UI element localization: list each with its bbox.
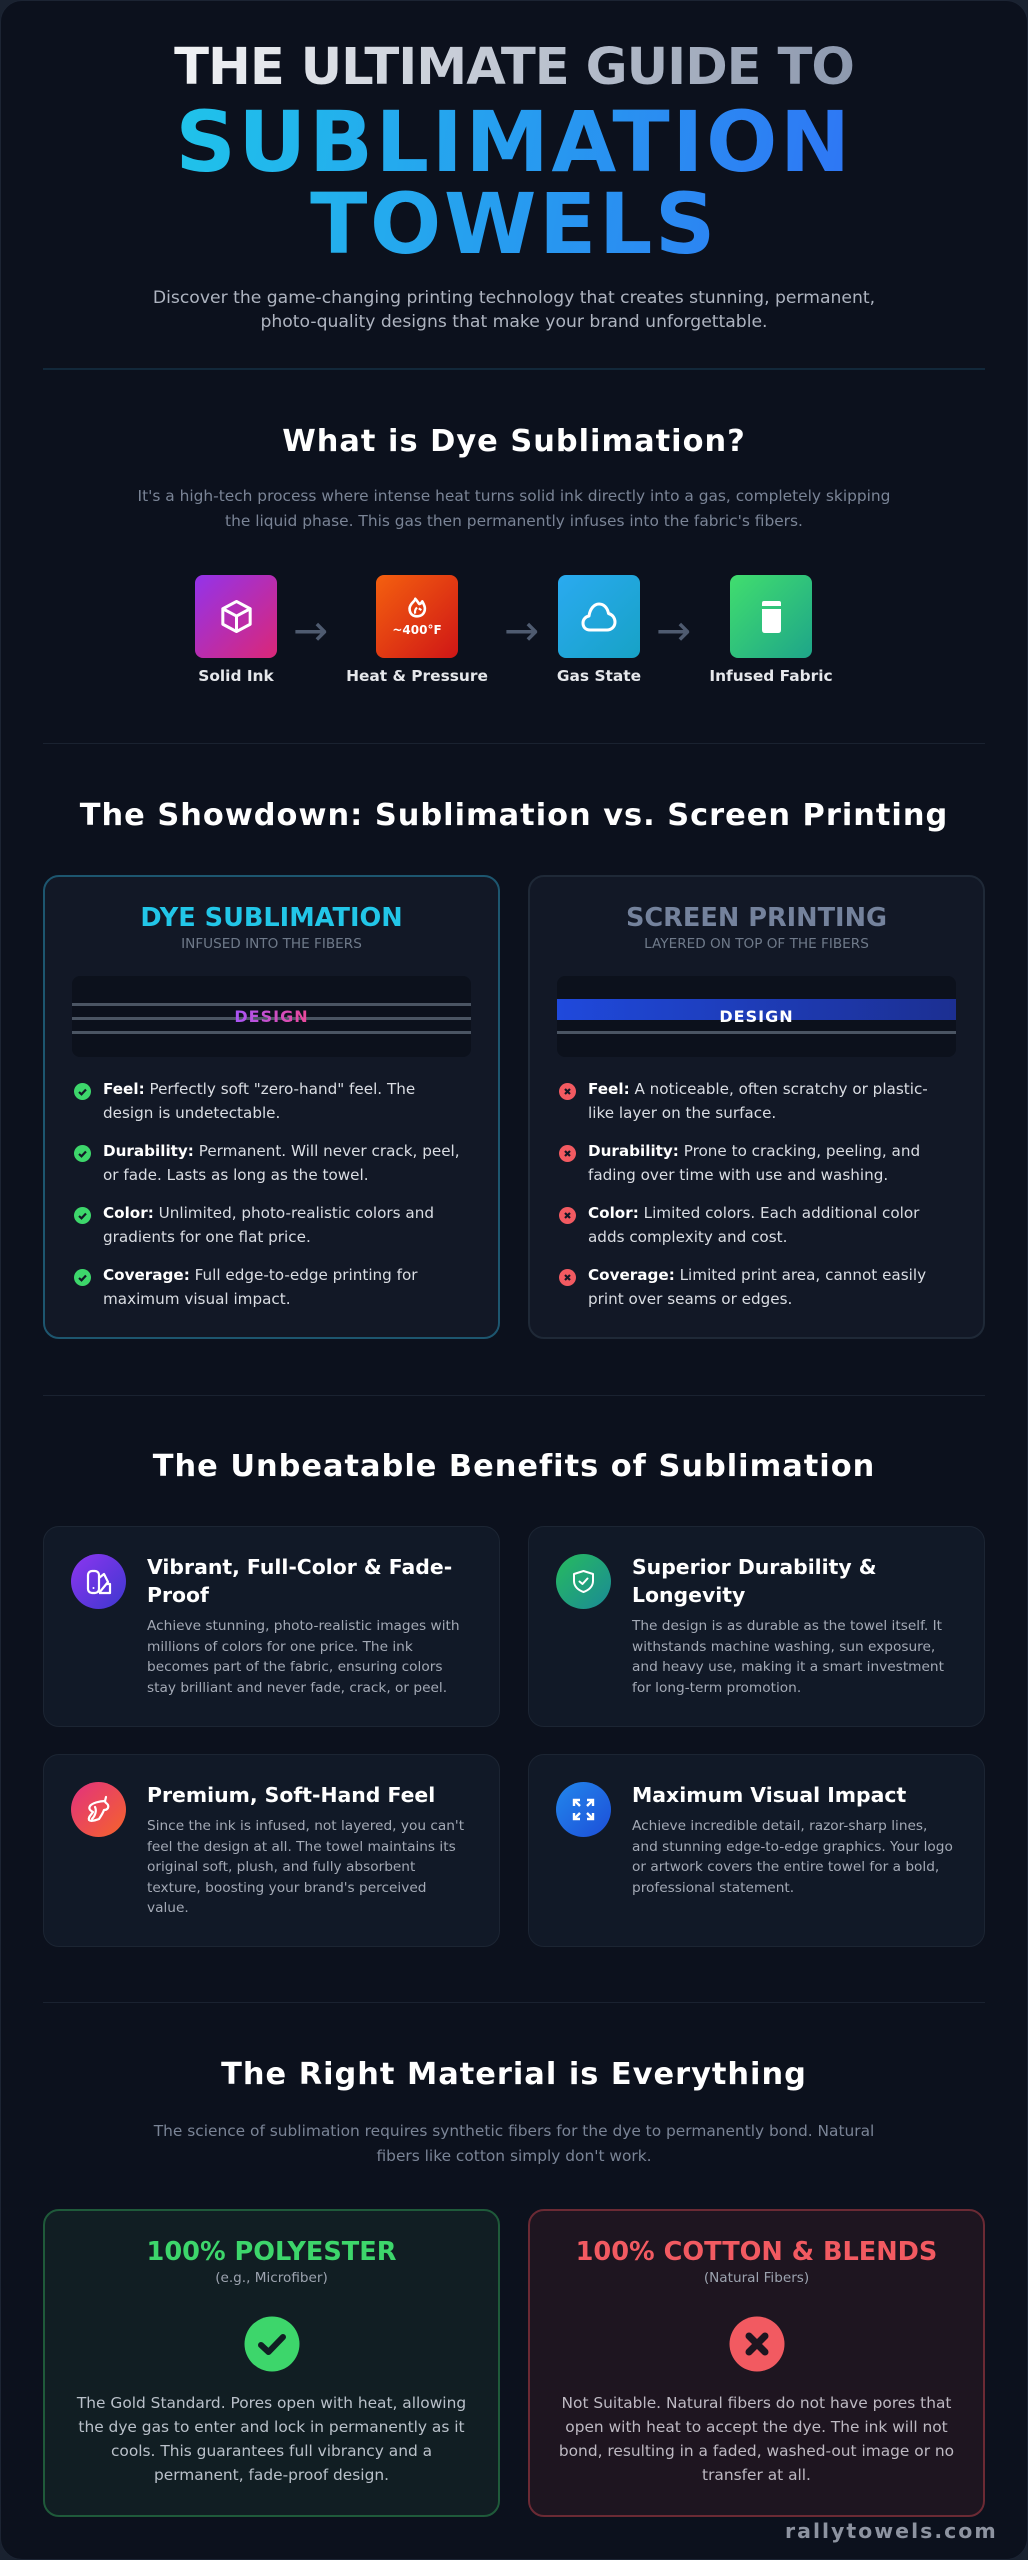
benefit card: durability — [528, 1526, 985, 1727]
panel title: DYE SUBLIMATION — [140, 903, 403, 933]
list item: feel: design is undetectable. — [103, 1104, 280, 1122]
benefit text: stay brilliant and never fade, crack, or peel. — [147, 1680, 447, 1696]
label: infused fabric: Infused Fabric — [709, 667, 833, 685]
label: heat and pressure: Heat & Pressure — [346, 667, 488, 685]
panel text: permanent, fade-proof design. — [154, 2466, 389, 2484]
list item: feel: Feel: A noticeable, often scratchy or plastic- — [588, 1080, 928, 1098]
panel: screen printing — [528, 875, 985, 1339]
icon: hand — [71, 1782, 126, 1837]
benefit text: texture, boosting your brand's perceived — [147, 1880, 426, 1896]
panel text: bond, resulting in a faded, washed-out image or no — [559, 2442, 954, 2460]
benefit title — [147, 1555, 452, 1606]
panel: cotton — [528, 2209, 985, 2517]
icon: cube — [221, 600, 252, 633]
heading: the showdown: The Showdown: Sublimation vs. Screen Printing — [80, 798, 948, 833]
panel subtitle: LAYERED ON TOP OF THE FIBERS — [644, 936, 869, 952]
list item: durability — [74, 1142, 460, 1184]
subtitle: Discover the game-changing printing technology that creates stunning, permanent, — [153, 288, 875, 308]
arrow: → — [504, 606, 539, 655]
icon: fabric roll — [762, 601, 781, 633]
intro text: It's a high-tech process where intense heat turns solid ink directly into a gas, completely skipping — [138, 487, 890, 505]
benefit text: millions of colors for one price. The ink — [147, 1638, 413, 1654]
panel text: the dye gas to enter and lock in permanently as it — [78, 2418, 465, 2436]
benefit title: Premium, Soft-Hand Feel — [147, 1783, 435, 1807]
list item: color: Color: Unlimited, photo-realistic colors and — [103, 1204, 434, 1222]
panel subtitle: INFUSED INTO THE FIBERS — [181, 936, 362, 952]
process step: heat and pressure — [376, 575, 458, 658]
title: sublimation towels: SUBLIMATION — [175, 93, 853, 191]
panel text: The Gold Standard. Pores open with heat, allowing — [77, 2394, 466, 2412]
icon: swatch — [71, 1554, 126, 1609]
benefit text: professional statement. — [632, 1880, 794, 1896]
benefit title: Superior Durability & — [632, 1555, 877, 1579]
benefit text: for long-term promotion. — [632, 1680, 801, 1696]
list item: color: Color: Limited colors. Each additional color — [588, 1204, 919, 1222]
benefit text: Achieve stunning, photo-realistic images with — [147, 1618, 460, 1634]
list item: feel: like layer on the surface. — [588, 1104, 776, 1122]
benefit text: The design is as durable as the towel itself. It — [632, 1618, 942, 1634]
list item: durability: or fade. Lasts as long as the towel. — [103, 1166, 369, 1184]
benefit card: vibrant — [43, 1526, 500, 1727]
panel title: 100% POLYESTER — [147, 2237, 396, 2267]
benefit text: and stunning edge-to-edge graphics. Your logo — [632, 1838, 953, 1854]
icon: cross — [559, 1269, 576, 1286]
material intro text: The science of sublimation requires synthetic fibers for the dye to permanently bond. Natural — [154, 2122, 874, 2140]
list item: coverage — [559, 1266, 926, 1308]
panel text: transfer at all. — [702, 2466, 811, 2484]
panel: dye sublimation — [43, 875, 500, 1339]
benefit card: visual impact — [528, 1754, 985, 1947]
list item: feel — [74, 1080, 415, 1122]
icon: cloud — [582, 602, 616, 632]
benefit text — [632, 1618, 944, 1696]
intro text: the liquid phase. This gas then permanently infuses into the fabric's fibers. — [225, 512, 803, 530]
panel text: cools. This guarantees full vibrancy and a — [111, 2442, 432, 2460]
label: solid ink: Solid Ink — [198, 667, 274, 685]
benefit text — [632, 1818, 953, 1896]
list item: durability: fading over time with use and washing. — [588, 1166, 888, 1184]
icon: check — [74, 1269, 91, 1286]
benefit card: soft hand — [43, 1754, 500, 1947]
list item: coverage — [74, 1266, 418, 1308]
panel text — [559, 2394, 954, 2484]
icon: shield — [556, 1554, 611, 1609]
icon: check — [74, 1207, 91, 1224]
benefit text: value. — [147, 1900, 189, 1916]
heading: what is dye sublimation: What is Dye Sublimation? — [282, 424, 746, 459]
panel subtitle: (Natural Fibers) — [704, 2270, 809, 2286]
process step: infused fabric — [730, 575, 812, 658]
process step: gas state — [558, 575, 640, 658]
title: sublimation towels — [170, 101, 858, 265]
panel: polyester — [43, 2209, 500, 2517]
list item: coverage: Coverage: Full edge-to-edge printing for — [103, 1266, 418, 1284]
list item: color: gradients for one flat price. — [103, 1228, 311, 1246]
panel text: open with heat to accept the dye. The ink will not — [565, 2418, 948, 2436]
list item: feel: Feel: Perfectly soft "zero-hand" feel. The — [103, 1080, 415, 1098]
benefit title: Longevity — [632, 1582, 745, 1606]
title: the ultimate guide to: THE ULTIMATE GUIDE TO — [174, 37, 854, 97]
list item: color — [74, 1204, 434, 1246]
benefit text: Since the ink is infused, not layered, you can't — [147, 1818, 464, 1834]
label: gas state: Gas State — [557, 667, 641, 685]
benefit text: Achieve incredible detail, razor-sharp lines, — [632, 1818, 927, 1834]
subtitle: photo-quality designs that make your brand unforgettable. — [260, 312, 768, 332]
intro text — [138, 487, 890, 530]
design label: DESIGN — [719, 1007, 794, 1026]
panel subtitle: (e.g., Microfiber) — [215, 2270, 328, 2286]
icon: check — [244, 2316, 300, 2372]
list item: durability — [559, 1142, 920, 1184]
benefit text — [147, 1618, 460, 1696]
heading: right material: The Right Material is Everything — [221, 2057, 807, 2092]
subtitle — [153, 288, 875, 332]
benefit title — [632, 1555, 877, 1606]
arrow: → — [293, 606, 328, 655]
diagram: layered design — [557, 976, 956, 1057]
diagram: infused design — [72, 976, 471, 1057]
arrow: → — [656, 606, 691, 655]
benefit text: or artwork covers the entire towel for a bold, — [632, 1859, 939, 1875]
list item: durability: Durability: Permanent. Will never crack, peel, — [103, 1142, 460, 1160]
icon: cross — [730, 2316, 784, 2372]
icon: cross — [559, 1145, 576, 1162]
benefit text: feel the design at all. The towel maintains its — [147, 1838, 456, 1854]
title: sublimation towels: TOWELS — [310, 175, 718, 273]
header — [153, 37, 875, 332]
icon: check — [74, 1083, 91, 1100]
list item: durability: Durability: Prone to cracking, peeling, and — [588, 1142, 920, 1160]
panel text — [76, 2394, 466, 2484]
watermark: rallytowels.com — [785, 2519, 998, 2543]
list item: color — [559, 1204, 920, 1246]
list item: coverage: maximum visual impact. — [103, 1290, 291, 1308]
list item: coverage: Coverage: Limited print area, cannot easily — [588, 1266, 926, 1284]
design label: DESIGN — [234, 1007, 309, 1026]
benefit title: Vibrant, Full-Color & Fade- — [147, 1555, 452, 1579]
list item: color: adds complexity and cost. — [588, 1228, 787, 1246]
panel text: Not Suitable. Natural fibers do not have pores that — [562, 2394, 951, 2412]
benefit title: Maximum Visual Impact — [632, 1783, 906, 1807]
icon: flame — [408, 597, 426, 618]
material intro text — [154, 2122, 874, 2165]
list item: coverage: print over seams or edges. — [588, 1290, 792, 1308]
benefit text: withstands machine washing, sun exposure, — [632, 1638, 935, 1654]
label: temperature: ~400°F — [392, 623, 442, 637]
benefit text: original soft, plush, and fully absorbent — [147, 1859, 415, 1875]
benefit text: becomes part of the fabric, ensuring colors — [147, 1659, 442, 1675]
benefit text: and heavy use, making it a smart investment — [632, 1659, 944, 1675]
panel title: 100% COTTON & BLENDS — [576, 2237, 937, 2267]
icon: expand — [556, 1782, 611, 1837]
list item: feel — [559, 1080, 928, 1122]
heading: benefits: The Unbeatable Benefits of Sublimation — [153, 1449, 875, 1484]
benefit text — [147, 1818, 464, 1916]
benefit title: Proof — [147, 1582, 209, 1606]
panel title: SCREEN PRINTING — [626, 903, 887, 933]
icon: check — [74, 1145, 91, 1162]
icon: cross — [559, 1207, 576, 1224]
process step: solid ink — [195, 575, 277, 658]
icon: cross — [559, 1083, 576, 1100]
material intro text: fibers like cotton simply don't work. — [376, 2147, 652, 2165]
